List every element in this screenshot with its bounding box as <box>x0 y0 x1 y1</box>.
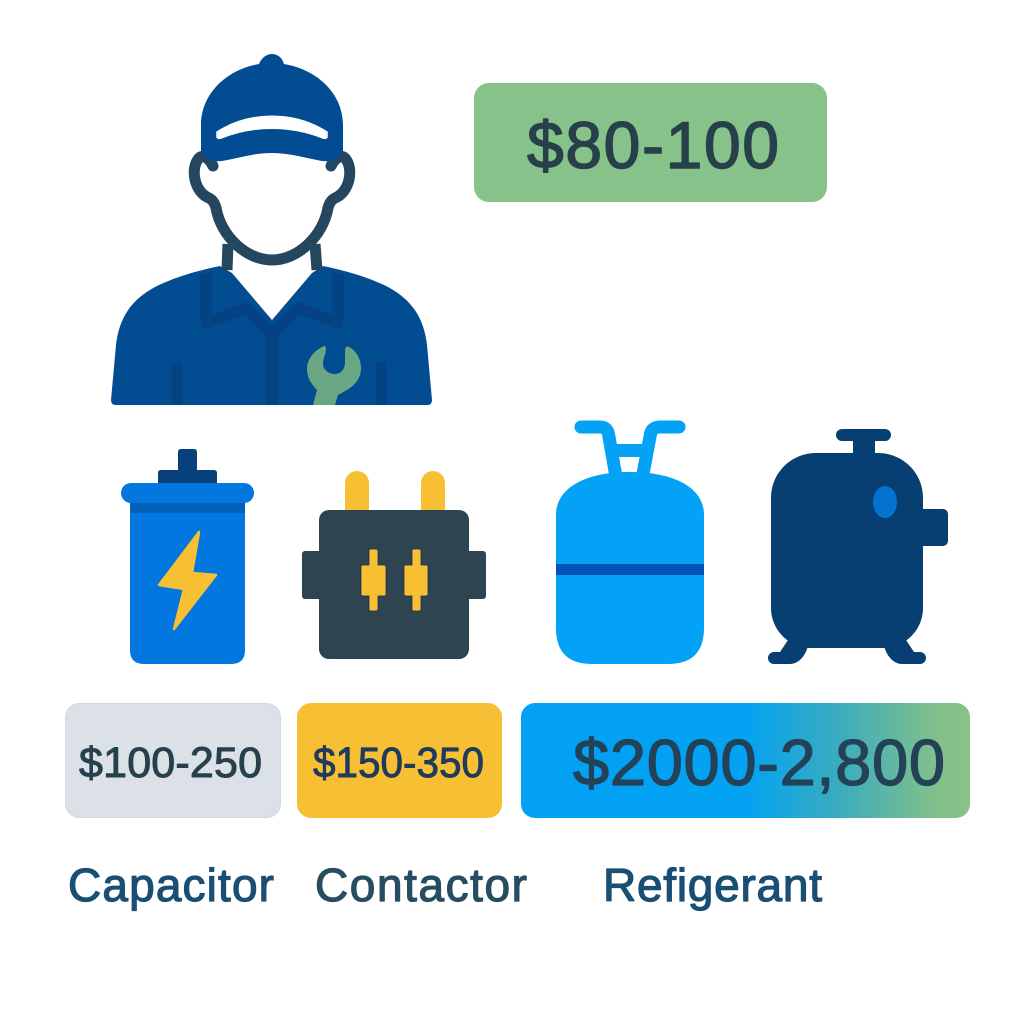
label: capacitor: Capacitor <box>68 859 274 911</box>
price badge: contactor: $150-350 <box>313 739 484 787</box>
face and neck outline <box>194 156 350 270</box>
lightning bolt <box>159 532 216 629</box>
icon: refrigerant cylinder <box>556 427 704 664</box>
shirt collar and seams <box>177 273 381 405</box>
icon: technician <box>111 54 432 405</box>
label: contactor: Contactor <box>315 859 527 911</box>
icon: contactor <box>302 471 486 659</box>
icon: wrench badge <box>307 346 361 405</box>
icon: capacitor <box>121 449 254 664</box>
technician cap <box>201 54 343 161</box>
cap highlight <box>217 116 327 138</box>
price badge: technician <box>474 83 827 202</box>
price badge: technician: $80-100 <box>527 108 779 182</box>
label: refrigerant: Refigerant <box>603 859 822 911</box>
price badge: refrigerant and compressor <box>521 703 970 818</box>
price badge: capacitor: $100-250 <box>79 739 262 787</box>
technician shirt <box>111 266 432 405</box>
price badge: contactor <box>297 703 502 818</box>
price badge: capacitor <box>66 704 280 818</box>
icon: compressor <box>768 429 948 664</box>
price badge: refrigerant and compressor: $2000-2,800 <box>573 726 945 799</box>
